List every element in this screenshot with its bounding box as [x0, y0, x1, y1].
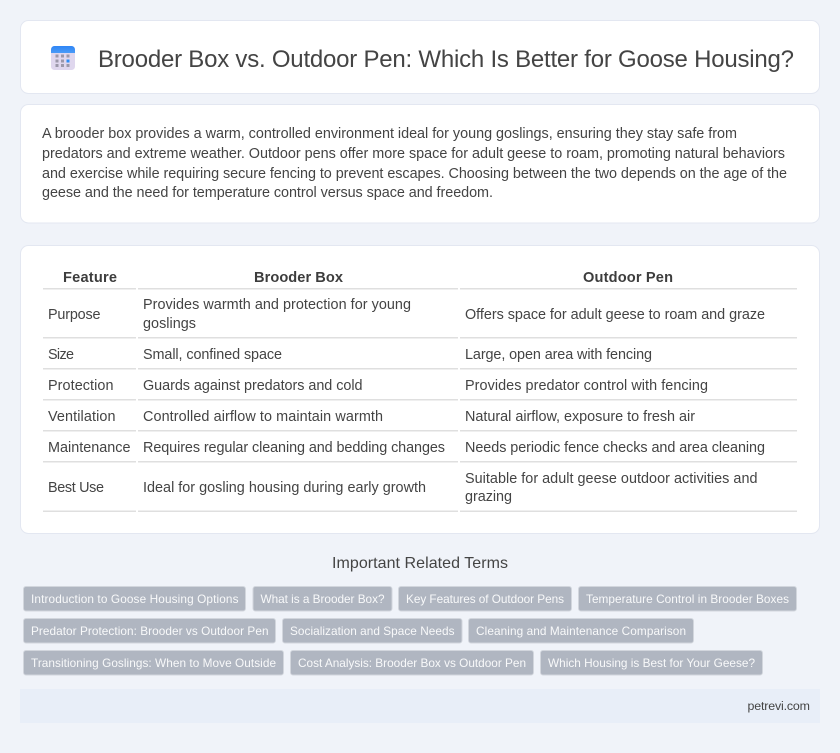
tag [468, 618, 694, 643]
tag: Key Features of Outdoor Pens [406, 592, 564, 606]
tag: Introduction to Goose Housing Options [31, 592, 239, 606]
row: maintenance: Requires regular cleaning and bedding changes [143, 440, 445, 456]
row: best use: Suitable for adult geese outdoor activities and [465, 471, 758, 487]
row: protection: Guards against predators and cold [143, 378, 362, 394]
row: maintenance: Maintenance [48, 440, 130, 456]
row: ventilation [43, 409, 797, 432]
row: purpose [43, 297, 797, 338]
row: protection: Provides predator control with fencing [465, 378, 708, 394]
tag: Predator Protection: Brooder vs Outdoor Pen [31, 624, 268, 638]
intro paragraph: geese and the need for temperature control versus space and freedom. [42, 185, 493, 201]
row: size: Size [48, 347, 74, 363]
tag: What is a Brooder Box? [260, 592, 385, 606]
row: best use: Best Use [48, 480, 104, 496]
title: Brooder Box vs. Outdoor Pen: Which Is Better for Goose Housing? [98, 46, 794, 73]
row: purpose: Purpose [48, 307, 100, 323]
tag: Transitioning Goslings: When to Move Outside [31, 656, 276, 670]
table header: Feature [63, 270, 117, 286]
tag [540, 650, 762, 675]
intro paragraph [42, 126, 787, 201]
row: best use: grazing [465, 489, 512, 505]
row: size: Small, confined space [143, 347, 282, 363]
panel: comparison table [20, 246, 820, 534]
intro paragraph: predators and extreme weather. Outdoor pens offer more space for adult geese to roam, promoting natural behaviors [42, 146, 785, 162]
intro paragraph: and exercise while requiring secure fencing to prevent escapes. Choosing between the two depends on the age of the [42, 166, 787, 182]
row: purpose: goslings [143, 316, 196, 332]
row: protection: Protection [48, 378, 114, 394]
footer site name: petrevi.com [748, 699, 810, 713]
table header: Brooder Box [254, 270, 344, 286]
tag [398, 586, 572, 611]
row: size [43, 347, 797, 370]
row: best use [43, 471, 797, 512]
tag [24, 586, 246, 611]
heading: related terms: Important Related Terms [332, 555, 508, 572]
tag: Which Housing is Best for Your Geese? [548, 656, 755, 670]
footer [20, 689, 820, 723]
header panel [20, 20, 820, 94]
tag [290, 650, 534, 675]
icon: calendar grid [51, 46, 75, 70]
tag [24, 618, 276, 643]
intro paragraph: A brooder box provides a warm, controlled environment ideal for young goslings, ensuring they stay safe from [42, 126, 737, 142]
tag [24, 650, 284, 675]
row: purpose: Provides warmth and protection for young [143, 297, 411, 313]
row: maintenance [43, 440, 797, 462]
table header [43, 270, 797, 290]
table header: Outdoor Pen [583, 270, 673, 286]
row: ventilation: Ventilation [48, 409, 116, 425]
row: size: Large, open area with fencing [465, 347, 652, 363]
row: maintenance: Needs periodic fence checks and area cleaning [465, 440, 765, 456]
panel: introduction [20, 104, 820, 223]
row: protection [43, 378, 797, 400]
tag [282, 618, 462, 643]
row: best use: Ideal for gosling housing during early growth [143, 480, 426, 496]
tag: Socialization and Space Needs [290, 624, 455, 638]
tag: Cost Analysis: Brooder Box vs Outdoor Pen [298, 656, 526, 670]
tag [253, 586, 392, 611]
row: purpose: Offers space for adult geese to roam and graze [465, 307, 765, 323]
tag: Temperature Control in Brooder Boxes [586, 592, 789, 606]
row: ventilation: Natural airflow, exposure to fresh air [465, 409, 695, 425]
tag [578, 586, 796, 611]
row: ventilation: Controlled airflow to maintain warmth [143, 409, 383, 425]
related term tags [24, 586, 796, 675]
tag: Cleaning and Maintenance Comparison [476, 624, 686, 638]
